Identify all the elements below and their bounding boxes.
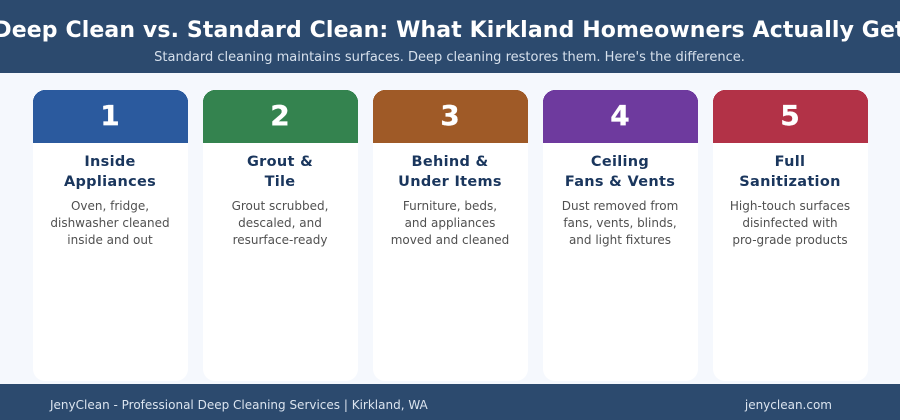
card 5 description: pro-grade products — [732, 233, 848, 247]
card 1 heading: Inside — [84, 154, 136, 170]
number header 2 — [203, 90, 358, 143]
card 1 description: dishwasher cleaned — [50, 216, 170, 230]
card 2 description: descaled, and — [238, 216, 322, 230]
panel: card 5 full sanitization — [713, 90, 868, 381]
number header 5: 5 — [780, 99, 800, 132]
number header 2: 2 — [270, 99, 290, 132]
number header 3 — [373, 90, 528, 143]
card 3 heading: Behind & — [412, 154, 489, 170]
panel: card 3 behind and under items — [373, 90, 528, 381]
card 4 heading: Fans & Vents — [565, 174, 675, 190]
card 1 heading: Appliances — [64, 174, 156, 190]
number header 1: 1 — [100, 99, 120, 132]
card 4 heading: Ceiling — [591, 154, 649, 170]
card 1 description: inside and out — [67, 233, 153, 247]
card 2 heading: Tile — [265, 174, 295, 190]
number header 4: 4 — [610, 99, 630, 132]
header banner — [0, 0, 900, 73]
card 5 heading: Sanitization — [739, 174, 841, 190]
card 2 description: Grout scrubbed, — [232, 199, 328, 213]
panel: card 1 inside appliances — [33, 90, 188, 381]
footer company text: JenyClean - Professional Deep Cleaning Services | Kirkland, WA — [49, 398, 429, 412]
card 4 description: and light fixtures — [569, 233, 671, 247]
card 2 heading: Grout & — [247, 154, 313, 170]
card 5 heading: Full — [775, 154, 805, 170]
card 3 heading: Under Items — [398, 174, 502, 190]
card 5 description: High-touch surfaces — [730, 199, 850, 213]
card 3 description: and appliances — [405, 216, 495, 230]
number header 4 — [543, 90, 698, 143]
subtitle: Standard cleaning maintains surfaces. Deep cleaning restores them. Here's the difference. — [154, 50, 745, 65]
card 4 description: fans, vents, blinds, — [563, 216, 677, 230]
card 1 description: Oven, fridge, — [71, 199, 149, 213]
card 3 description: moved and cleaned — [391, 233, 509, 247]
card 3 description: Furniture, beds, — [403, 199, 497, 213]
footer bar — [0, 384, 900, 420]
card 2 description: resurface-ready — [233, 233, 327, 247]
title: Deep Clean vs. Standard Clean: What Kirkland Homeowners Actually Get — [0, 18, 900, 43]
number header 3: 3 — [440, 99, 460, 132]
panel: card 2 grout and tile — [203, 90, 358, 381]
panel: card 4 ceiling fans and vents — [543, 90, 698, 381]
card 5 description: disinfected with — [742, 216, 838, 230]
card 4 description: Dust removed from — [562, 199, 678, 213]
number header 5 — [713, 90, 868, 143]
number header 1 — [33, 90, 188, 143]
footer website: jenyclean.com — [744, 398, 832, 412]
